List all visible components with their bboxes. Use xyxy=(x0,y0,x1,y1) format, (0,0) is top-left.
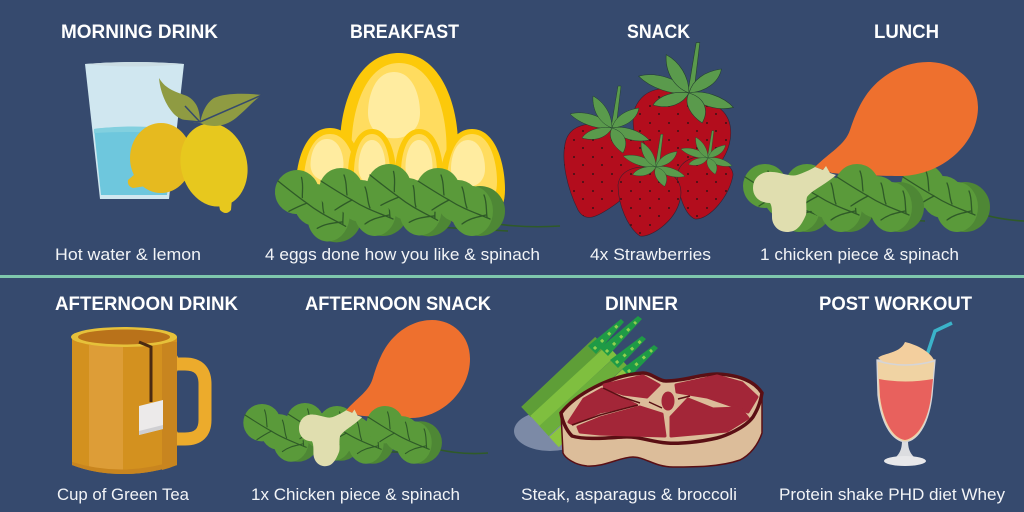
panel: afternoon drink xyxy=(55,294,238,504)
caption: green tea: Cup of Green Tea xyxy=(57,485,190,504)
heading: afternoon snack: AFTERNOON SNACK xyxy=(305,294,491,315)
icon: chicken leg on spinach xyxy=(743,62,1024,232)
caption: chicken and spinach: 1 chicken piece & spinach xyxy=(760,245,959,264)
caption: eggs and spinach: 4 eggs done how you like & spinach xyxy=(265,245,540,264)
icon: steak and asparagus xyxy=(514,316,762,467)
heading: afternoon drink: AFTERNOON DRINK xyxy=(55,294,238,315)
heading: snack: SNACK xyxy=(627,22,690,43)
icon: chicken leg on spinach xyxy=(243,320,488,466)
caption: hot water and lemon: Hot water & lemon xyxy=(55,245,201,264)
panel: morning drink xyxy=(55,22,262,264)
caption: steak, asparagus and broccoli: Steak, asparagus & broccoli xyxy=(521,485,737,504)
panel: post workout xyxy=(779,294,1005,504)
panel: lunch xyxy=(743,22,1024,264)
caption: chicken and spinach: 1x Chicken piece & spinach xyxy=(251,485,460,504)
icon: protein shake xyxy=(877,323,952,466)
panel: breakfast xyxy=(265,22,560,264)
icon: mug of green tea xyxy=(71,327,205,474)
caption: strawberries: 4x Strawberries xyxy=(590,245,711,264)
panel: snack xyxy=(564,22,733,264)
icon: strawberries xyxy=(564,43,733,236)
heading: dinner: DINNER xyxy=(605,294,678,315)
heading: morning drink: MORNING DRINK xyxy=(61,22,218,43)
divider xyxy=(0,275,1024,278)
panel: afternoon snack xyxy=(243,294,491,504)
panel: dinner xyxy=(514,294,762,504)
icon: eggs on spinach xyxy=(270,53,560,245)
heading: post workout: POST WORKOUT xyxy=(819,294,972,315)
icon: glass of water with lemons xyxy=(85,62,262,214)
heading: breakfast: BREAKFAST xyxy=(350,22,459,43)
caption: protein shake: Protein shake PHD diet Whey xyxy=(779,485,1005,504)
heading: lunch: LUNCH xyxy=(874,22,939,43)
